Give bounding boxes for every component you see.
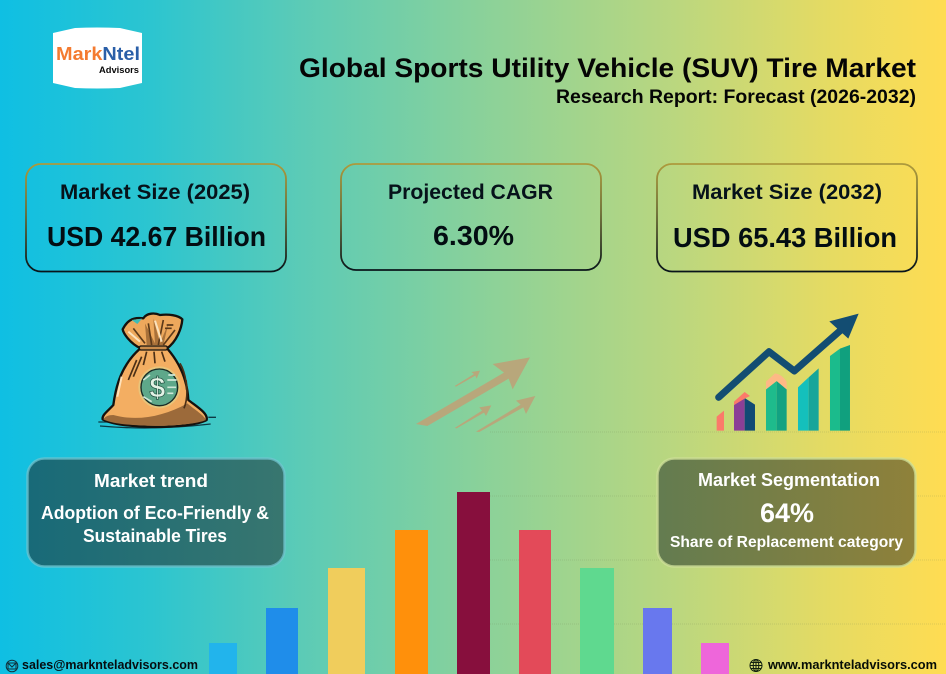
icon: rising bar chart with arrow xyxy=(717,314,859,431)
panel: market size 2032 xyxy=(657,164,917,272)
logo: MarkNtel Advisors: MarkNtel xyxy=(56,43,140,64)
panel: projected CAGR xyxy=(341,164,601,270)
panel: market size 2025 xyxy=(26,164,286,272)
logo: MarkNtel Advisors: Advisors xyxy=(99,65,139,76)
panel: market size 2032: USD 65.43 Billion xyxy=(673,222,897,253)
panel: market trend: Market trend xyxy=(94,471,208,491)
panel: market size 2025: USD 42.67 Billion xyxy=(47,221,266,252)
panel: market trend: Adoption of Eco-Friendly & xyxy=(41,503,269,523)
title: Global Sports Utility Vehicle (SUV) Tire Market xyxy=(299,53,916,83)
panel: market segmentation: Share of Replacement category xyxy=(670,534,903,551)
title: Research Report: Forecast (2026-2032) xyxy=(556,87,916,108)
panel: market size 2025: Market Size (2025) xyxy=(60,181,250,204)
logo: MarkNtel Advisors xyxy=(53,28,142,88)
panel: market trend xyxy=(28,458,284,566)
icon: money bag: $ xyxy=(149,372,165,404)
bar chart xyxy=(209,492,729,674)
panel: market segmentation xyxy=(658,458,916,566)
footer: website contact: www.marknteladvisors.com xyxy=(767,657,937,672)
panel: market segmentation: Market Segmentation xyxy=(698,470,880,490)
panel: projected CAGR: 6.30% xyxy=(433,220,514,251)
footer: email contact: sales@marknteladvisors.com xyxy=(22,657,198,672)
panel: market size 2032: Market Size (2032) xyxy=(692,181,882,204)
panel: projected CAGR: Projected CAGR xyxy=(388,181,553,204)
panel: market segmentation: 64% xyxy=(760,498,814,528)
title xyxy=(299,53,916,108)
icon: faded growth arrows xyxy=(416,357,535,432)
icon: money bag xyxy=(98,314,216,428)
panel: market trend: Sustainable Tires xyxy=(83,526,227,546)
